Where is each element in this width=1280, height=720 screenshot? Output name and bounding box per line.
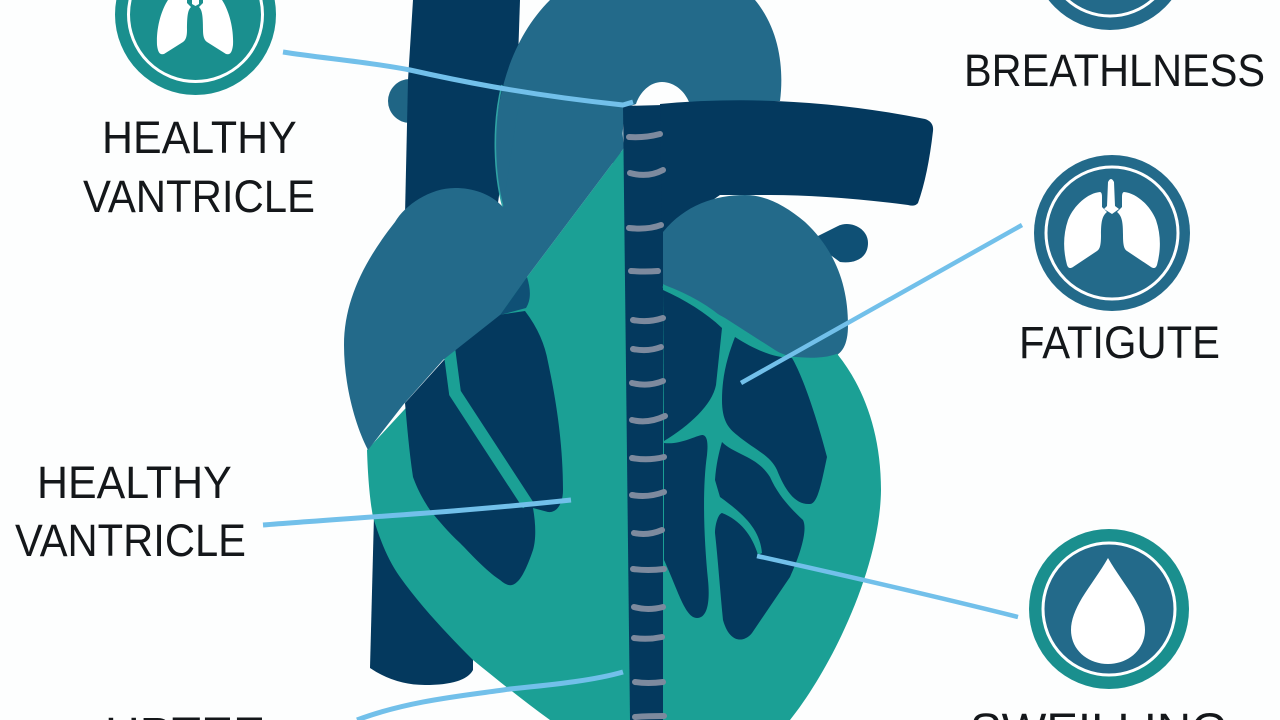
icon: lungs right	[1034, 155, 1190, 311]
left ventricle vein	[448, 340, 528, 505]
aortic arch highlight	[495, 85, 503, 207]
left nub vessel	[388, 79, 432, 123]
leader line: top left to aorta	[283, 52, 633, 105]
label: healthy ventricle middle: HEALTHY	[37, 457, 232, 508]
left ventricle chamber	[405, 311, 563, 585]
superior vena cava	[405, 0, 520, 215]
icon: lungs top left	[115, 0, 276, 95]
label: healthy ventricle top: HEALTHY	[102, 112, 297, 163]
left atrium	[663, 195, 848, 359]
leader line: fatigue	[741, 225, 1022, 383]
leader line: middle left to ventricle	[263, 500, 571, 525]
icon: top right circle	[1032, 0, 1188, 30]
right chambers	[663, 290, 827, 640]
teal heart body	[367, 148, 881, 720]
right atrium	[344, 95, 624, 450]
central striped column	[623, 105, 663, 720]
grey rungs	[629, 134, 665, 717]
heart illustration	[344, 0, 933, 720]
label: healthy ventricle top: VANTRICLE	[83, 171, 315, 222]
left atrium teal edge	[663, 286, 838, 359]
small vessel between atrium and chamber	[500, 277, 530, 315]
icon: water drop	[1029, 529, 1189, 689]
leader line: swelling	[757, 556, 1018, 617]
pulmonary artery	[660, 100, 933, 235]
label: fatigue: FATIGUTE	[1019, 317, 1220, 368]
leader line: bottom left	[357, 672, 623, 720]
right nub vessel	[810, 224, 868, 262]
inferior vena cava	[370, 515, 473, 685]
label: healthy ventricle middle: VANTRICLE	[15, 515, 246, 566]
aortic arch	[495, 0, 781, 208]
